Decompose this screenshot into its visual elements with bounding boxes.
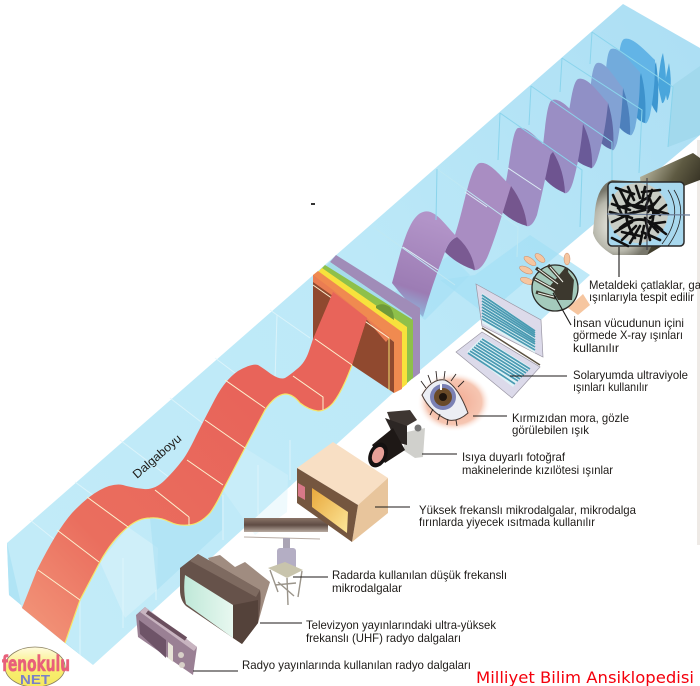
icon: microwave oven	[297, 442, 388, 542]
caption: ultraviolet	[573, 368, 688, 394]
caption: high frequency microwaves: Yüksek frekanslı mikrodalgalar, mikrodalga	[419, 503, 636, 517]
caption: infrared: makinelerinde kızılötesi ışınlar	[462, 463, 613, 477]
logo	[2, 647, 70, 686]
icon: radar	[244, 518, 328, 605]
caption: visible light: görülebilen ışık	[512, 423, 590, 437]
colour layers of visible light	[313, 255, 420, 393]
caption: metal cracks	[589, 278, 700, 304]
caption: ultraviolet: Solaryumda ultraviyole	[573, 368, 688, 382]
caption: UHF: frekanslı (UHF) radyo dalgaları	[306, 631, 461, 645]
caption: UHF	[306, 618, 497, 645]
cross-section frames	[373, 32, 673, 285]
stray print speck	[311, 203, 315, 205]
label: wavelength: Dalgaboyu	[130, 431, 184, 481]
caption: low frequency microwaves	[332, 568, 507, 595]
caption: ultraviolet: ışınları kullanılır	[573, 380, 648, 394]
caption: low frequency microwaves: mikrodalgalar	[332, 581, 402, 595]
caption: infrared: Isıya duyarlı fotoğraf	[462, 450, 566, 464]
icon: television	[180, 554, 270, 644]
caption: x-ray: görmede X-ray ışınları	[573, 328, 683, 342]
caption: high frequency microwaves	[419, 503, 636, 529]
icon: eye	[417, 371, 491, 432]
icon: metal gamma ray tube	[593, 153, 700, 255]
caption: high frequency microwaves: fırınlarda yiyecek ısıtmada kullanılır	[419, 515, 595, 529]
paper edge shading	[697, 140, 700, 545]
icon: camera	[364, 410, 425, 471]
leader lines	[193, 247, 619, 671]
icon: solarium	[456, 284, 543, 398]
caption: low frequency microwaves: Radarda kullanılan düşük frekanslı	[332, 568, 507, 582]
icon: x-ray of hand	[518, 252, 590, 315]
logo: fenokulu	[2, 652, 70, 676]
caption: x-ray	[573, 316, 684, 355]
caption: x-ray: İnsan vücudunun içini	[573, 316, 684, 330]
caption: radio waves: Radyo yayınlarında kullanılan radyo dalgaları	[242, 658, 471, 672]
purple to blue high frequency wave	[392, 39, 671, 317]
icon: radio	[136, 607, 197, 675]
caption: x-ray: kullanılır	[573, 341, 619, 355]
red low frequency wave	[22, 292, 367, 643]
caption: visible light: Kırmızıdan mora, gözle	[512, 411, 629, 425]
caption: visible light	[512, 411, 629, 437]
caption: infrared	[462, 450, 613, 477]
caption: UHF: Televizyon yayınlarındaki ultra-yüksek	[306, 618, 497, 632]
caption: metal cracks: ışınlarıyla tespit edilir	[589, 290, 694, 304]
